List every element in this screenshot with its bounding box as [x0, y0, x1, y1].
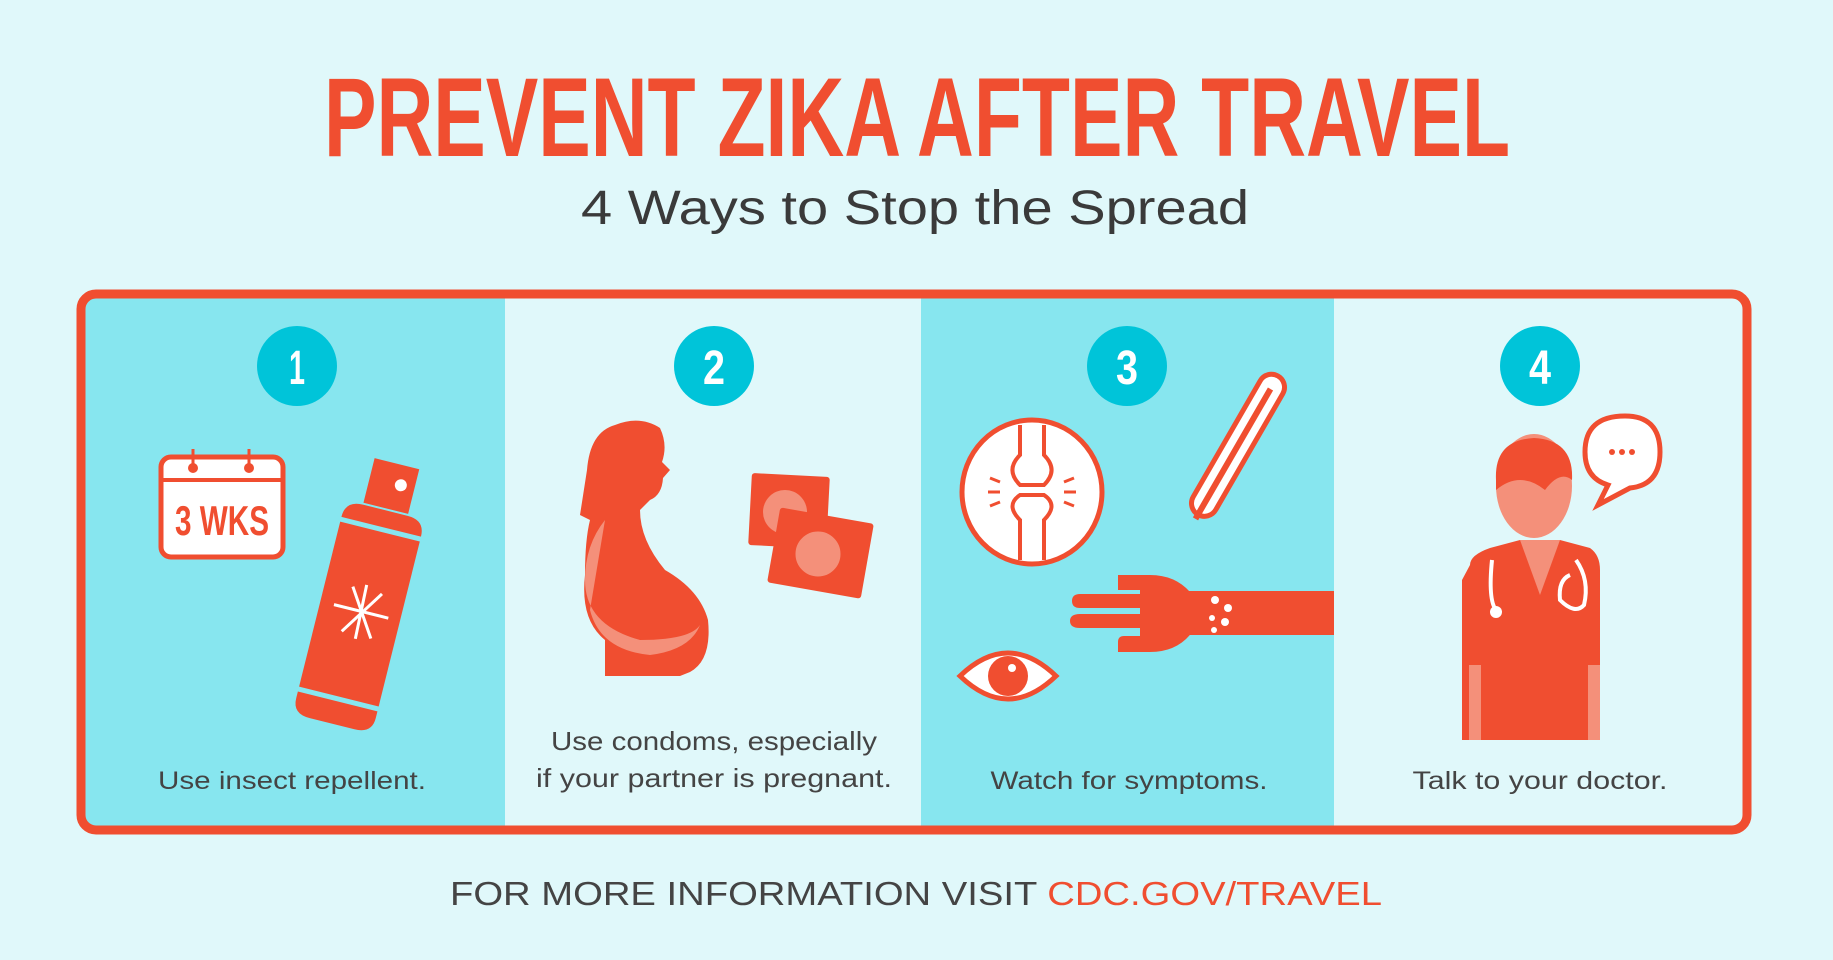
number badge 3: 3 — [1116, 342, 1138, 395]
icon: joint — [962, 420, 1102, 564]
number badge 3 — [1087, 326, 1167, 406]
number badge 4 — [1500, 326, 1580, 406]
icon: condom packets — [748, 473, 874, 599]
icon: speech bubble — [1585, 416, 1660, 505]
icon: doctor — [1462, 434, 1600, 740]
number badge 2 — [674, 326, 754, 406]
panel 2: condoms — [536, 326, 892, 793]
number badge 2: 2 — [703, 342, 725, 395]
panel 3 background — [921, 297, 1334, 827]
icon: pregnant woman — [580, 421, 709, 676]
caption 1: Use insect repellent. — [158, 767, 426, 795]
panel 3: symptoms — [960, 326, 1334, 795]
caption 2: Use condoms, especially — [551, 726, 877, 756]
caption 4: Talk to your doctor. — [1412, 767, 1668, 795]
number badge 4: 4 — [1529, 342, 1551, 395]
icon: spray can — [292, 454, 437, 734]
number badge 1 — [257, 326, 337, 406]
icon: calendar 3 WKS: 3 WKS — [175, 497, 269, 544]
footer: FOR MORE INFORMATION VISIT CDC.GOV/TRAVEL — [450, 875, 1382, 912]
subtitle: 4 Ways to Stop the Spread — [581, 182, 1249, 235]
panel 1 background — [84, 297, 505, 827]
caption 2: if your partner is pregnant. — [536, 763, 892, 793]
caption 3: Watch for symptoms. — [990, 767, 1268, 795]
icon: arm with rash — [1070, 575, 1334, 652]
icon: calendar 3 WKS — [161, 449, 283, 557]
panel 4: doctor — [1412, 326, 1668, 795]
main frame — [81, 294, 1747, 830]
caption 2 — [536, 726, 892, 793]
panel 1: insect repellent — [158, 326, 437, 795]
icon: red eye — [960, 653, 1056, 699]
icon: thermometer — [1184, 369, 1289, 525]
number badge 1: 1 — [289, 342, 305, 395]
